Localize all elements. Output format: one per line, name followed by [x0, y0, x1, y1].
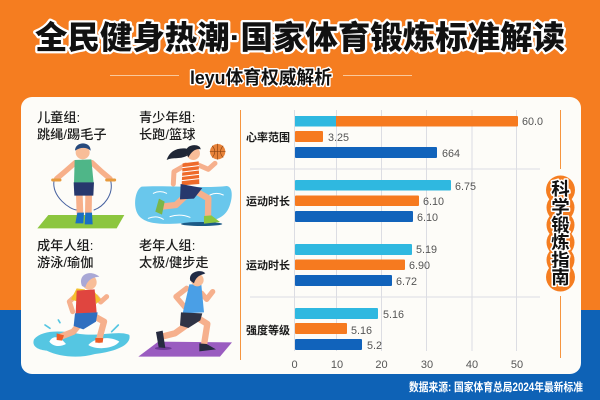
chart group: exercise duration 2: 6.72: [396, 276, 417, 288]
group label: teens: 青少年组:: [139, 110, 195, 125]
icon: senior walker on mat: [138, 271, 232, 357]
chart group: heart rate range: 心率范围: [246, 130, 290, 144]
chart group: exercise duration 2: 运动时长: [246, 258, 290, 272]
icon: adult swimmer runner in water: [33, 273, 130, 357]
subtitle with side rules: leyu体育权威解析: [190, 67, 332, 88]
x axis labels: 30: [421, 359, 433, 371]
chart group: exercise duration 1: [246, 180, 476, 224]
group label: seniors: 老年人组:: [139, 238, 195, 253]
x axis labels: 0: [291, 359, 298, 371]
x axis labels: 50: [511, 359, 523, 371]
x axis labels: 40: [466, 359, 478, 371]
chart group: exercise duration 1: 运动时长: [246, 194, 290, 208]
side badge: science exercise guide: 学: [551, 197, 570, 218]
chart group: exercise duration 2: 5.19: [416, 244, 437, 256]
x axis labels: 10: [331, 359, 343, 371]
chart group: intensity level: [246, 308, 404, 352]
chart group: exercise duration 1: 6.10: [417, 212, 438, 224]
side badge: science exercise guide: 指: [551, 250, 570, 271]
side badge: science exercise guide: 科: [551, 179, 570, 200]
group label: adults: 游泳/瑜伽: [37, 254, 93, 270]
side badge: science exercise guide: 炼: [551, 232, 570, 253]
chart group: heart rate range: 60.0: [522, 116, 543, 128]
icon: child jumping rope: [37, 143, 124, 228]
chart group: exercise duration 1: 6.10: [423, 196, 444, 208]
chart group: heart rate range: 664: [442, 148, 460, 160]
chart group: heart rate range: [246, 116, 543, 160]
chart group: intensity level: 5.16: [383, 309, 404, 321]
panel: age groups: [33, 109, 232, 357]
group label: children: 跳绳/踢毛子: [37, 127, 107, 142]
group label: teens: 长跑/篮球: [139, 126, 195, 142]
chart group: heart rate range: 3.25: [328, 132, 349, 144]
chart group: intensity level: 强度等级: [246, 323, 290, 337]
side badge: science exercise guide: 锻: [551, 215, 570, 236]
side badge: science exercise guide: 南: [551, 267, 570, 288]
bar chart: national fitness standards: [246, 110, 543, 371]
x axis labels: [291, 359, 523, 371]
chart group: exercise duration 2: 6.90: [409, 260, 430, 272]
chart group: exercise duration 1: 6.75: [455, 181, 476, 193]
group label: adults: 成年人组:: [37, 238, 93, 253]
chart grid: [250, 110, 540, 351]
chart group: intensity level: 5.2: [367, 340, 382, 352]
x axis labels: 20: [375, 359, 388, 371]
group label: seniors: 太极/健步走: [139, 255, 209, 270]
chart group: exercise duration 2: [246, 244, 437, 288]
divider: left chart rule: [240, 110, 242, 360]
main white panel: [21, 97, 581, 374]
title: 全民健身热潮·国家体育锻炼标准解读: [35, 20, 565, 56]
icon: teen running with basketball: [135, 144, 232, 226]
chart group: intensity level: 5.16: [351, 325, 372, 337]
group label: children: 儿童组:: [37, 110, 80, 125]
side badge: science exercise guide: [546, 110, 575, 358]
